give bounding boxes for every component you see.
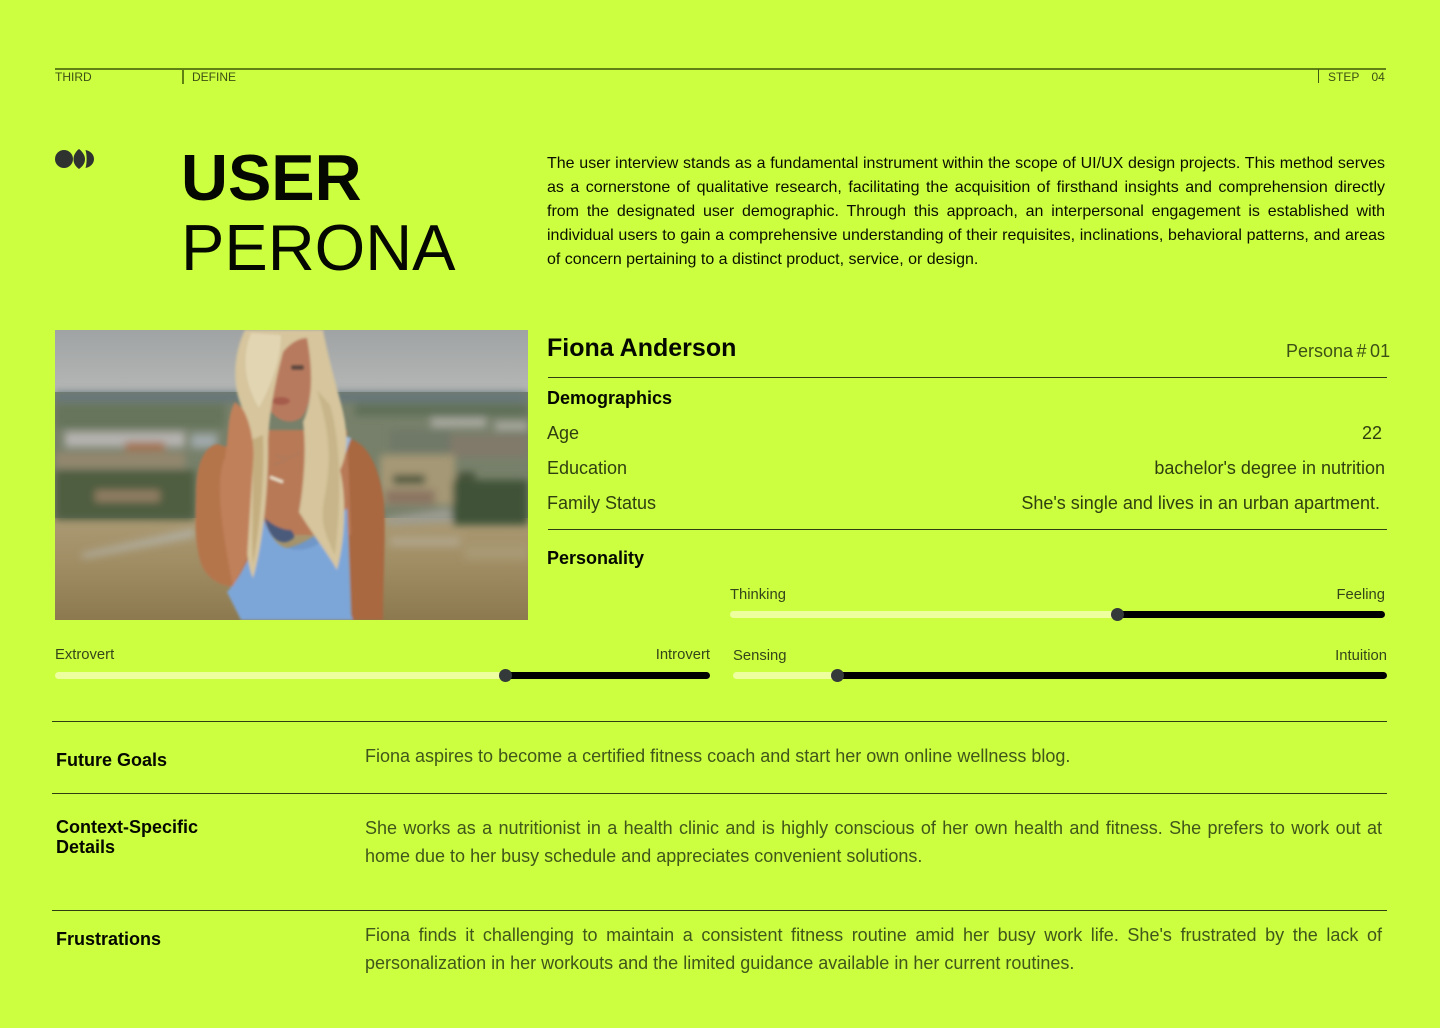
persona name: Fiona Anderson bbox=[547, 334, 736, 362]
title bbox=[181, 141, 456, 284]
row: frustrations: Frustrations bbox=[56, 929, 161, 949]
header label: step: STEP 04 bbox=[1328, 70, 1385, 84]
slider: sensing intuition bbox=[733, 648, 1387, 682]
intro paragraph bbox=[547, 155, 1385, 268]
row: context-specific details: Details bbox=[56, 837, 115, 857]
row: context-specific details: home due to her busy schedule and appreciates convenient solutions. bbox=[365, 846, 922, 866]
intro paragraph: as a cornerstone of qualitative research, facilitating the acquisition of firsthand insights and comprehension directly bbox=[547, 179, 1385, 196]
demographics heading: Demographics bbox=[547, 388, 672, 408]
title: PERONA bbox=[181, 211, 456, 284]
right arm bbox=[347, 438, 385, 620]
demographics section bbox=[547, 388, 1385, 513]
header label: define: DEFINE bbox=[192, 70, 236, 84]
intro paragraph: individual users to gain a comprehensive understanding of their requisites, inclinations, behavioral patterns, and areas bbox=[547, 227, 1385, 244]
intro paragraph: The user interview stands as a fundamental instrument within the scope of UI/UX design projects. This method serves bbox=[547, 155, 1385, 172]
title: USER bbox=[181, 141, 362, 214]
intro paragraph: of concern pertaining to a distinct product, service, or design. bbox=[547, 251, 978, 268]
slider: sensing intuition: Intuition bbox=[1335, 648, 1387, 664]
row: context-specific details: Context-Specific bbox=[56, 817, 198, 837]
row: frustrations: personalization in her workouts and the limited guidance available in her current routines. bbox=[365, 953, 1074, 973]
left arm bbox=[196, 444, 253, 586]
row: future goals: Future Goals bbox=[56, 750, 167, 770]
face bbox=[267, 335, 312, 422]
row: frustrations: Fiona finds it challenging to maintain a consistent fitness routine amid her busy work life. She's frustrated by the lack of bbox=[365, 925, 1382, 945]
slider: sensing intuition: Sensing bbox=[733, 648, 786, 664]
persona photo bbox=[55, 330, 528, 620]
top bbox=[227, 508, 353, 620]
row: frustrations bbox=[56, 925, 1382, 973]
demographics section: bachelor's degree in nutrition bbox=[1154, 458, 1385, 478]
header bar bbox=[55, 68, 1386, 84]
education: Education bbox=[547, 458, 627, 478]
persona number: Persona # 01 bbox=[1286, 341, 1390, 361]
slider: thinking feeling: Feeling bbox=[1336, 587, 1385, 603]
hair bbox=[235, 330, 346, 578]
family status: Family Status bbox=[547, 493, 656, 513]
slider: thinking feeling bbox=[730, 587, 1385, 621]
row: future goals bbox=[56, 746, 1070, 770]
row: context-specific details: She works as a nutritionist in a health clinic and is highly conscious of her own health and fitness. She prefers to work out at bbox=[365, 818, 1382, 838]
personality heading: Personality bbox=[547, 548, 644, 568]
demographics section: 22 bbox=[1362, 423, 1382, 443]
slider: extrovert introvert: Extrovert bbox=[55, 647, 114, 663]
header label: third: THIRD bbox=[55, 70, 92, 84]
row: future goals: Fiona aspires to become a certified fitness coach and start her own online wellness blog. bbox=[365, 746, 1070, 766]
forearm and hand bbox=[220, 402, 253, 586]
slider: extrovert introvert: Introvert bbox=[656, 647, 710, 663]
age: Age bbox=[547, 423, 579, 443]
intro paragraph: from the designated user demographic. Through this approach, an interpersonal engagement is established with bbox=[547, 203, 1385, 220]
chest bbox=[253, 430, 351, 535]
icon: three dots logo bbox=[55, 149, 94, 169]
slider: extrovert introvert bbox=[55, 647, 710, 682]
demographics section: She's single and lives in an urban apartment. bbox=[1021, 493, 1380, 513]
slider: thinking feeling: Thinking bbox=[730, 587, 786, 603]
row: context-specific details bbox=[56, 817, 1382, 866]
